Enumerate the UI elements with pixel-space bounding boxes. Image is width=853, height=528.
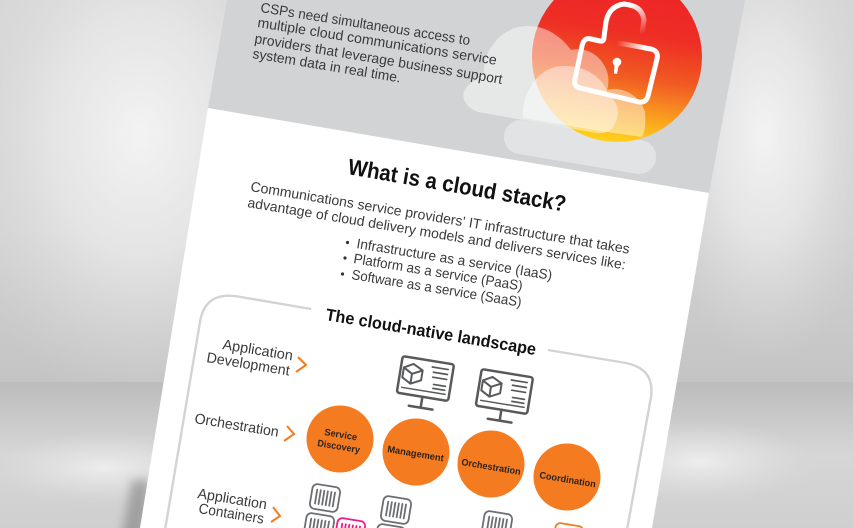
circle: Service Discovery bbox=[306, 406, 374, 472]
text block: CSP access requirement bbox=[252, 0, 504, 87]
circle: Management bbox=[382, 418, 450, 486]
padlock body bbox=[575, 4, 657, 102]
circle: Coordination: Coordination bbox=[539, 470, 597, 490]
heading: The cloud-native landscape: The cloud-native landscape bbox=[324, 305, 538, 359]
list: service models: Platform as a service (PaaS) bbox=[353, 250, 524, 294]
text block: CSP access requirement: providers that leverage business support bbox=[254, 30, 504, 87]
row label: Application Development bbox=[205, 337, 306, 380]
circle: Service Discovery: Discovery bbox=[317, 438, 361, 456]
heading: What is a cloud stack?: What is a cloud stack? bbox=[346, 154, 568, 217]
padlock fading edge bbox=[618, 43, 646, 48]
icon: monitor 1 bbox=[395, 356, 454, 412]
list: service models: Software as a service (SaaS) bbox=[351, 266, 523, 310]
circle: Service Discovery: Service bbox=[324, 427, 358, 443]
text block: definition: advantage of cloud delivery models and delivers services like: bbox=[247, 194, 627, 273]
row label: Application Containers: Application bbox=[196, 486, 268, 513]
circle: Coordination bbox=[534, 444, 600, 510]
icon: open padlock on gradient circle with clouds bbox=[463, 0, 702, 176]
icon: container stack bbox=[303, 483, 584, 528]
icon: monitor 2 bbox=[474, 369, 533, 425]
front cloud bbox=[523, 66, 645, 137]
text block: CSP access requirement: multiple cloud communications service bbox=[257, 14, 498, 68]
keyhole bbox=[613, 58, 621, 74]
text block: CSP access requirement: CSPs need simultaneous access to bbox=[260, 0, 472, 48]
circle: Orchestration: Orchestration bbox=[461, 457, 522, 478]
row label: Application Development: Development bbox=[205, 350, 291, 380]
circle: Management: Management bbox=[387, 444, 445, 465]
text block: definition: Communications service providers' IT infrastructure that takes bbox=[250, 178, 631, 257]
row label: Application Development: Application bbox=[221, 337, 294, 364]
row label: Orchestration: Orchestration bbox=[193, 411, 280, 441]
infographic sheet top: grey panel bbox=[208, 0, 745, 193]
list: service models bbox=[341, 235, 553, 310]
panel frame: cloud-native landscape bbox=[165, 296, 651, 528]
row label: Application Containers bbox=[196, 486, 280, 528]
row label: Application Containers: Containers bbox=[197, 501, 265, 528]
rear cloud bbox=[463, 26, 618, 133]
cloud pill behind circle bbox=[501, 118, 659, 176]
circle: Orchestration bbox=[458, 430, 524, 498]
gradient circle bbox=[532, 0, 702, 142]
main white panel bbox=[140, 108, 709, 528]
list: service models: Infrastructure as a service (IaaS) bbox=[356, 235, 553, 283]
text block: CSP access requirement: system data in real time. bbox=[252, 45, 402, 85]
padlock shackle fade bbox=[629, 5, 644, 34]
